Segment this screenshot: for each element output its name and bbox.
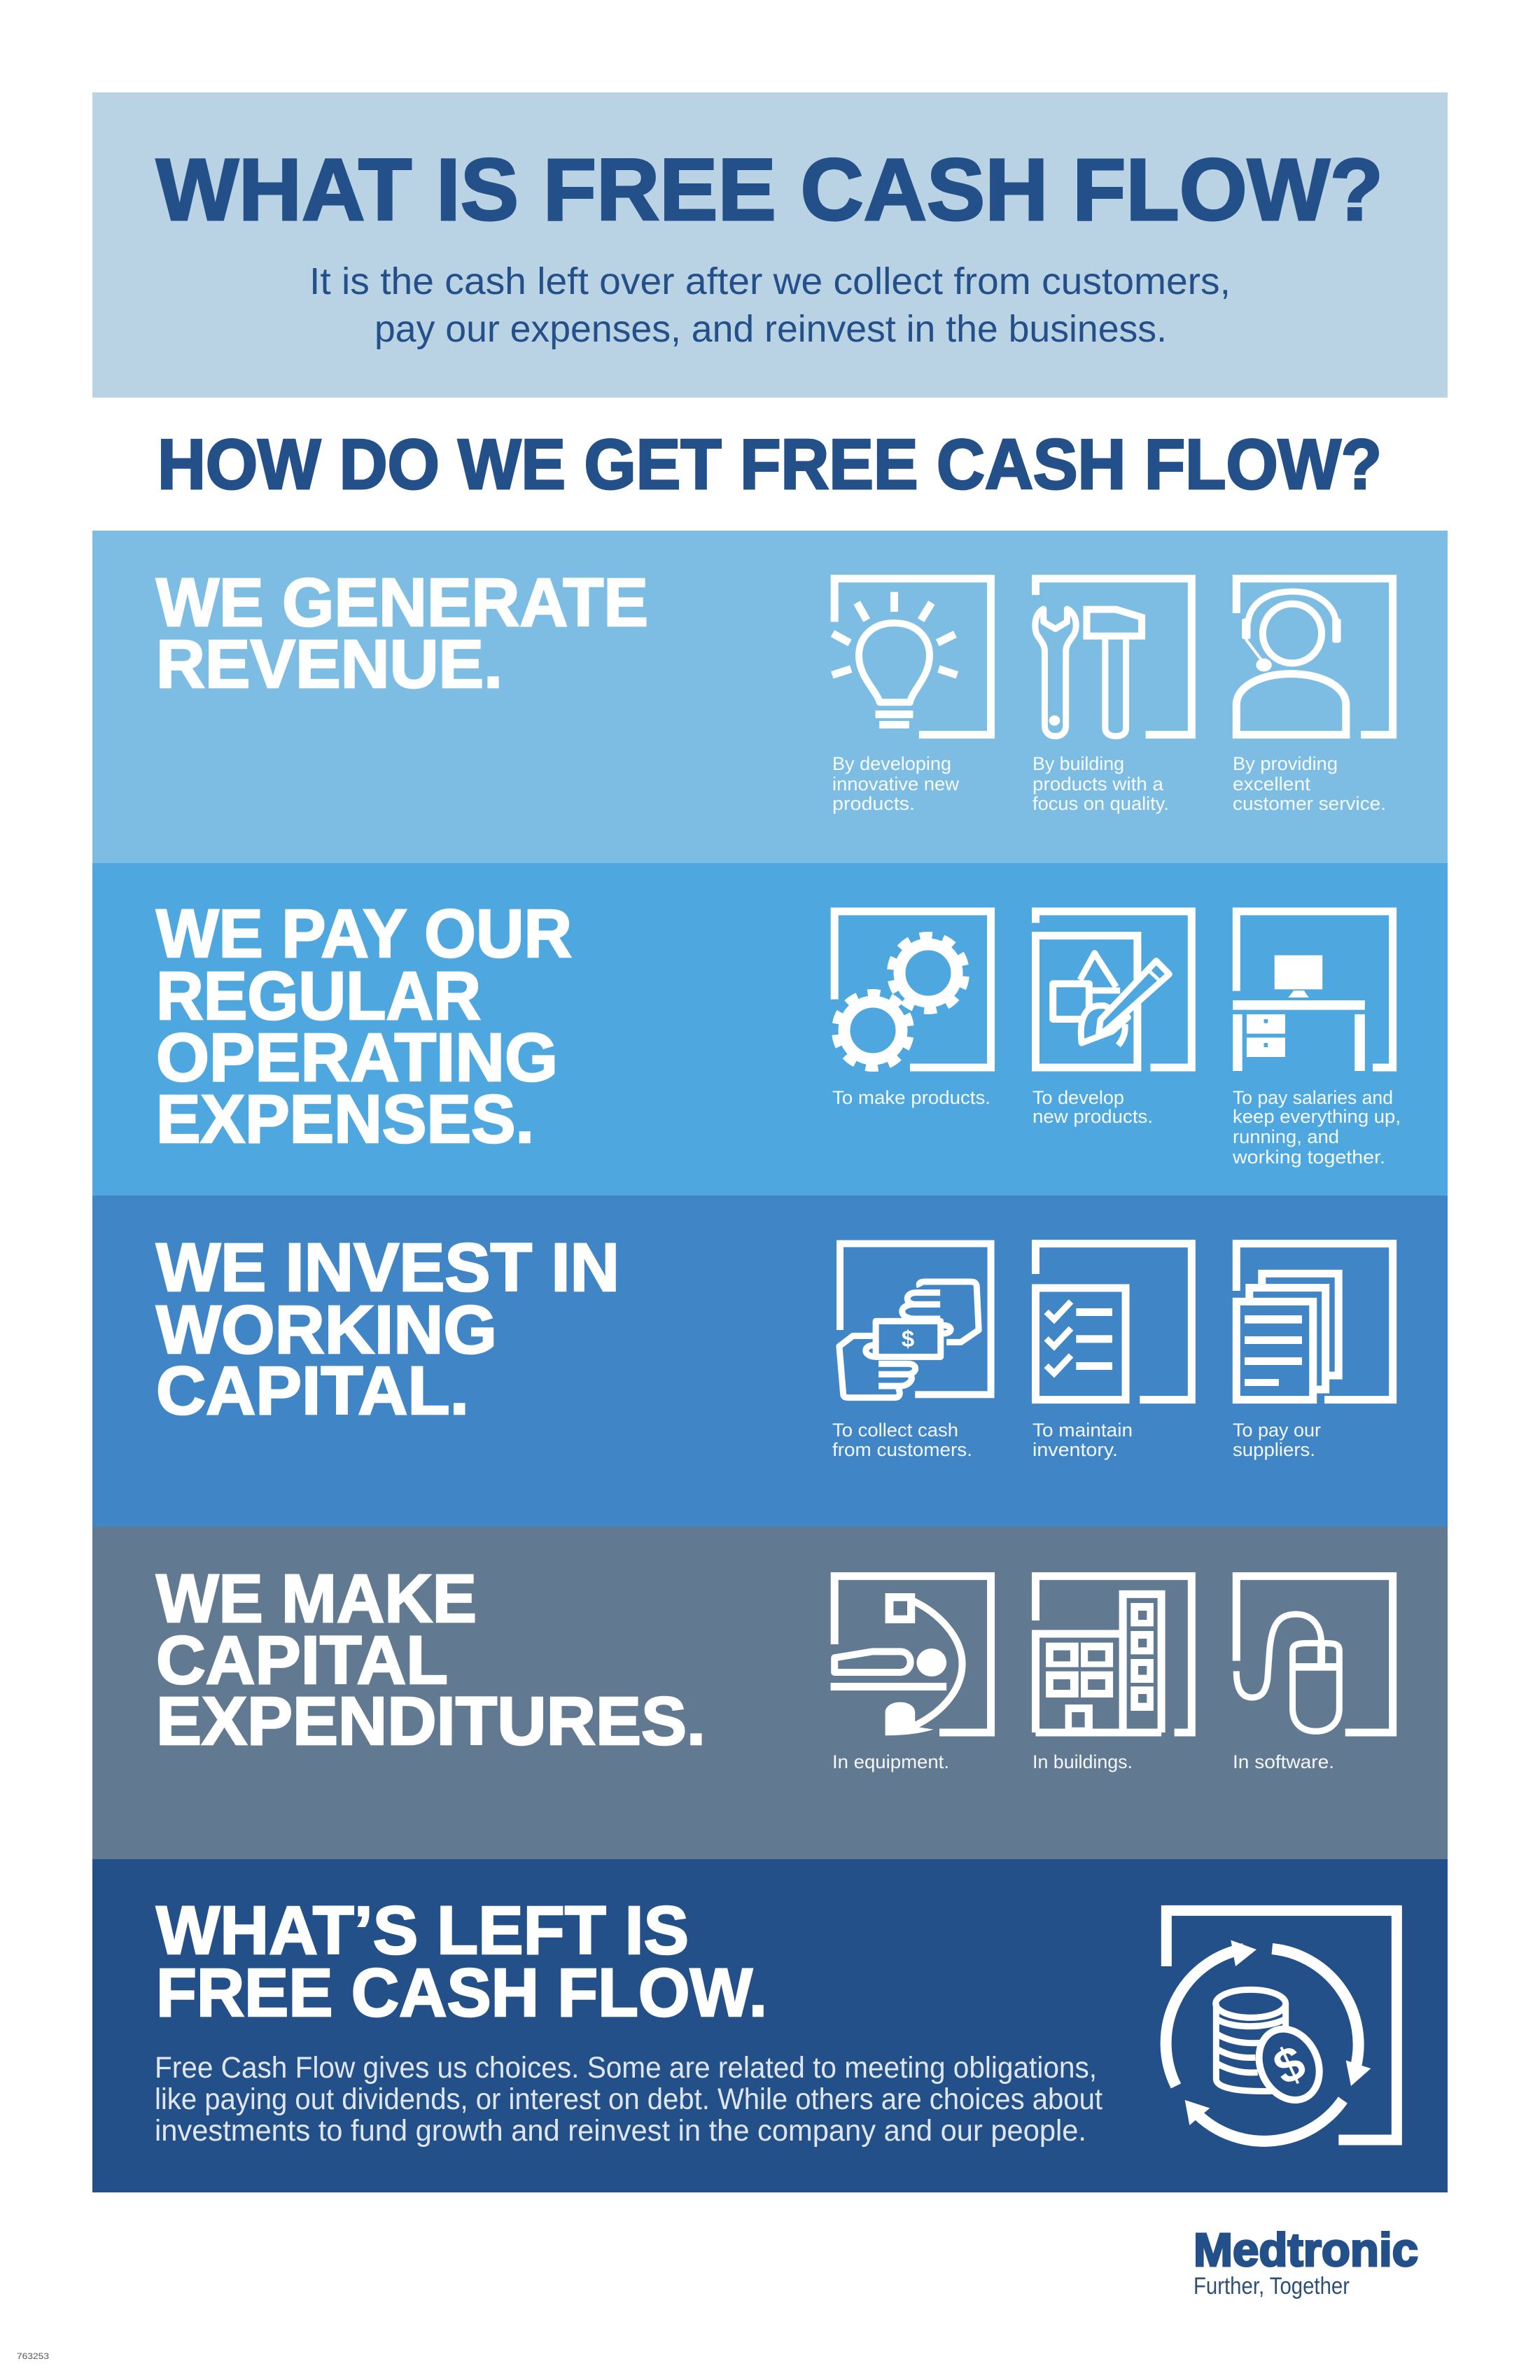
icon: buildings <box>1036 1576 1191 1732</box>
caption: service: By providing <box>1233 753 1338 774</box>
icon: coins in circular arrows: $ <box>1266 2034 1313 2096</box>
caption: service <box>1233 753 1386 814</box>
caption: buildings: In buildings. <box>1032 1751 1133 1772</box>
heading: we pay our regular operating expenses: WE PAY OUR <box>156 895 572 972</box>
caption: equipment: In equipment. <box>832 1751 949 1772</box>
logo: Medtronic: Further, Together <box>1194 2273 1350 2300</box>
logo: Medtronic <box>1194 2224 1418 2300</box>
subtitle: pay our expenses, and reinvest in the business. <box>374 308 1167 350</box>
heading: what's left is free cash flow: WHAT’S LEFT IS <box>156 1892 689 1968</box>
caption: products <box>832 753 959 814</box>
logo: Medtronic: Medtronic <box>1194 2224 1418 2276</box>
heading: we pay our regular operating expenses: OPERATING <box>156 1019 558 1096</box>
caption: products: innovative new <box>832 774 959 794</box>
body text: like paying out dividends, or interest on debt. While others are choices about <box>155 2082 1102 2116</box>
caption: collect cash <box>832 1420 972 1460</box>
caption: salaries <box>1232 1087 1401 1168</box>
caption: suppliers: suppliers. <box>1233 1439 1315 1460</box>
caption: suppliers <box>1233 1420 1321 1460</box>
job code: 763253 <box>17 2351 49 2361</box>
heading: we make capital expenditures <box>156 1560 706 1759</box>
caption: collect cash: To collect cash <box>832 1420 958 1441</box>
caption: salaries: running, and <box>1233 1126 1339 1147</box>
caption: collect cash: from customers. <box>832 1439 972 1460</box>
caption: products: By developing <box>832 753 951 774</box>
body text: investments to fund growth and reinvest in the company and our people. <box>155 2114 1086 2148</box>
caption: quality: focus on quality. <box>1032 793 1169 814</box>
icon: light bulb <box>832 579 991 735</box>
panel: operating expenses <box>92 863 1448 1196</box>
caption: products: products. <box>832 793 915 814</box>
icon: gears <box>830 911 991 1073</box>
icon: headset agent <box>1236 579 1393 735</box>
caption: salaries: working together. <box>1232 1147 1385 1168</box>
panel: free cash flow <box>92 1859 1448 2192</box>
panel: header <box>92 92 1448 398</box>
icon: design tablet and pencil <box>1036 911 1191 1068</box>
caption: make products: To make products. <box>832 1087 990 1108</box>
icon: coins in circular arrows <box>1166 1910 1396 2141</box>
section heading: HOW DO WE GET FREE CASH FLOW? <box>158 426 1382 504</box>
caption: quality: products with a <box>1032 774 1164 794</box>
title: WHAT IS FREE CASH FLOW? <box>156 141 1383 239</box>
heading: we make capital expenditures: EXPENDITURES. <box>156 1683 706 1759</box>
heading: we invest in working capital: WORKING <box>156 1292 497 1368</box>
caption: quality: By building <box>1032 753 1124 774</box>
icon: hands exchanging cash: $ <box>902 1326 914 1352</box>
panel: capital expenditures <box>92 1527 1448 1860</box>
caption: software: In software. <box>1233 1751 1334 1772</box>
heading: we invest in working capital: WE INVEST IN <box>156 1229 620 1306</box>
heading: what's left is free cash flow: FREE CASH FLOW. <box>156 1954 767 2031</box>
heading: we pay our regular operating expenses <box>156 895 572 1157</box>
icon: desk with computer <box>1233 911 1393 1071</box>
caption: develop products: To develop <box>1032 1087 1124 1108</box>
icon: computer mouse <box>1236 1576 1393 1732</box>
caption: service: excellent <box>1233 774 1311 794</box>
body text: Free Cash Flow gives us choices. Some are related to meeting obligations, <box>155 2051 1097 2085</box>
heading: we make capital expenditures: CAPITAL <box>156 1622 448 1698</box>
caption: inventory: To maintain <box>1032 1420 1133 1441</box>
icon: medical scanner <box>831 1576 991 1735</box>
caption: develop products: new products. <box>1032 1106 1153 1127</box>
caption: develop products <box>1032 1087 1153 1127</box>
heading: we invest in working capital: CAPITAL. <box>156 1352 469 1429</box>
panel: generate revenue <box>92 531 1448 864</box>
caption: quality <box>1032 753 1169 814</box>
caption: salaries: keep everything up, <box>1233 1106 1401 1127</box>
caption: salaries: To pay salaries and <box>1233 1087 1393 1108</box>
heading: we pay our regular operating expenses: EXPENSES. <box>156 1081 534 1157</box>
icon: stacked documents <box>1236 1244 1393 1400</box>
body text <box>155 2051 1102 2148</box>
subtitle <box>309 260 1231 350</box>
caption: suppliers: To pay our <box>1233 1420 1321 1441</box>
heading: what's left is free cash flow <box>156 1892 767 2031</box>
icon: wrench and hammer <box>1035 579 1191 736</box>
panel: working capital <box>92 1196 1448 1527</box>
heading: we generate revenue: WE GENERATE <box>156 564 648 640</box>
heading: we make capital expenditures: WE MAKE <box>156 1560 477 1637</box>
caption: service: customer service. <box>1233 793 1386 814</box>
heading: we generate revenue: REVENUE. <box>156 626 503 702</box>
heading: we pay our regular operating expenses: REGULAR <box>156 958 481 1034</box>
caption: inventory: inventory. <box>1032 1439 1118 1460</box>
caption: inventory <box>1032 1420 1133 1460</box>
heading: we generate revenue <box>156 564 648 702</box>
heading: we invest in working capital <box>156 1229 620 1429</box>
subtitle: It is the cash left over after we collect from customers, <box>309 260 1231 302</box>
icon: checklist <box>1036 1244 1191 1400</box>
icon: hands exchanging cash <box>839 1244 991 1398</box>
